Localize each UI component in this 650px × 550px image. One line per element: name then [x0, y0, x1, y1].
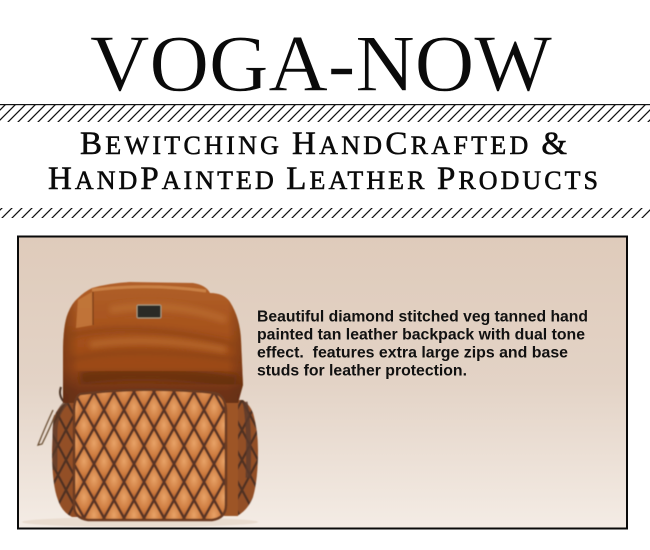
panel: product	[17, 236, 628, 530]
description text: effect. features extra large zips and base	[257, 344, 568, 362]
bottom hatched band	[0, 208, 650, 218]
description text: Beautiful diamond stitched veg tanned hand	[257, 308, 588, 326]
top hatched band	[0, 104, 650, 122]
heading: product line: HANDPAINTED LEATHER PRODUCTS	[48, 161, 598, 197]
strap loop	[38, 410, 55, 445]
image: leather backpack	[22, 280, 258, 527]
heading: product line: BEWITCHING HANDCRAFTED &	[80, 126, 567, 162]
right side pocket	[226, 400, 258, 516]
description text: studs for leather protection.	[257, 362, 467, 380]
zip flap	[76, 292, 93, 328]
heading: product line	[48, 126, 598, 197]
left side pocket	[52, 402, 80, 517]
title: VOGA-NOW: VOGA-NOW	[90, 18, 553, 108]
front diamond pocket	[74, 390, 226, 520]
upper body	[63, 282, 243, 403]
brand label	[137, 305, 161, 318]
description text: painted tan leather backpack with dual tone	[257, 326, 585, 344]
